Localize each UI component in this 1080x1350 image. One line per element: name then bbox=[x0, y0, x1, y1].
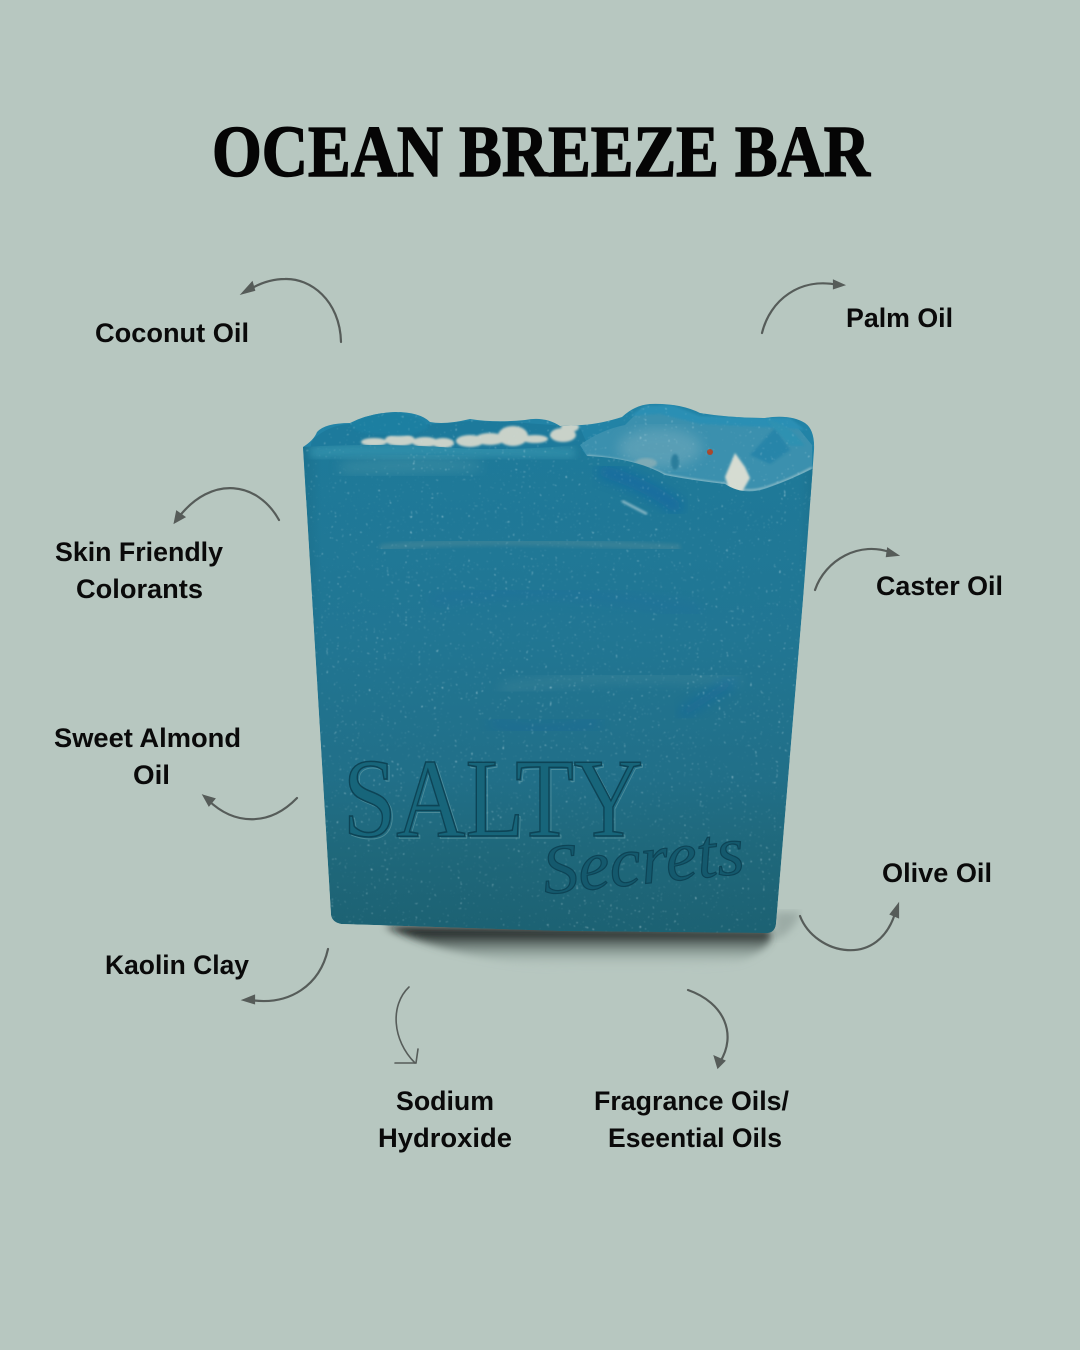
label: skin friendly colorants: Skin Friendly bbox=[55, 537, 223, 567]
label: sodium hydroxide: Sodium bbox=[396, 1086, 494, 1116]
arrow: sodium hydroxide bbox=[395, 987, 418, 1063]
label: fragrance and essential oils bbox=[594, 1086, 789, 1153]
stamped logo: SALTY bbox=[343, 737, 643, 861]
label: fragrance and essential oils: Fragrance Oils/ bbox=[594, 1086, 789, 1116]
arrow: fragrance oils bbox=[688, 990, 728, 1067]
arrow: olive oil bbox=[800, 905, 898, 950]
soap body bbox=[295, 435, 825, 940]
label: sodium hydroxide bbox=[378, 1086, 512, 1153]
stamped logo bbox=[343, 737, 748, 910]
salt crystals bbox=[361, 422, 579, 448]
label: fragrance and essential oils: Eseential Oils bbox=[608, 1123, 782, 1153]
label: olive oil: Olive Oil bbox=[882, 858, 992, 888]
label: kaolin clay: Kaolin Clay bbox=[105, 950, 249, 980]
arrow: palm oil bbox=[762, 281, 843, 333]
soap bar photo bbox=[295, 400, 825, 969]
arrow: coconut oil bbox=[243, 279, 341, 342]
label: sweet almond oil bbox=[54, 723, 241, 790]
colour swirls bbox=[309, 445, 730, 692]
label: sweet almond oil: Oil bbox=[133, 760, 170, 790]
label: sodium hydroxide: Hydroxide bbox=[378, 1123, 512, 1153]
stamped logo: Secrets bbox=[539, 812, 748, 910]
label: skin friendly colorants: Colorants bbox=[76, 574, 203, 604]
soap shadow bbox=[385, 912, 800, 969]
label: palm oil: Palm Oil bbox=[846, 303, 953, 333]
label: coconut oil: Coconut Oil bbox=[95, 318, 249, 348]
speckles bbox=[295, 400, 825, 940]
soap top and bevel bbox=[295, 400, 825, 940]
label: skin friendly colorants bbox=[55, 537, 223, 604]
label: sweet almond oil: Sweet Almond bbox=[54, 723, 241, 753]
title: OCEAN BREEZE BAR bbox=[212, 111, 871, 192]
broken corner bbox=[580, 408, 812, 490]
salt chip and speck bbox=[725, 453, 750, 492]
arrow: sweet almond oil bbox=[204, 796, 297, 819]
arrow: skin friendly colorants bbox=[175, 488, 279, 522]
stamped logo: SALTY bbox=[345, 739, 645, 863]
arrow: caster oil bbox=[815, 549, 897, 590]
arrow: kaolin clay bbox=[244, 949, 328, 1003]
label: caster oil: Caster Oil bbox=[876, 571, 1003, 601]
